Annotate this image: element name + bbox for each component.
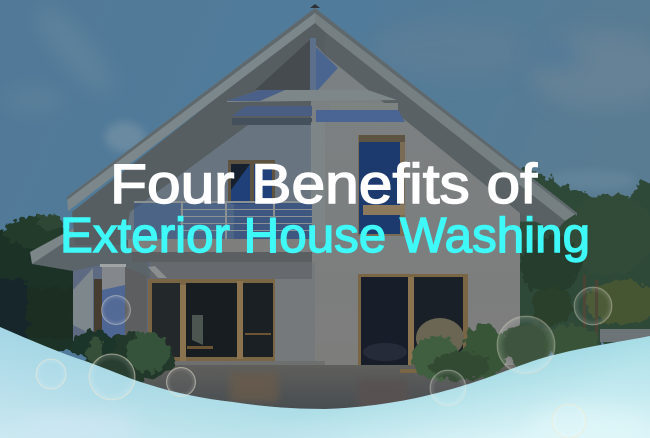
upper left door window: [228, 160, 275, 204]
lower right sliding window: [358, 274, 468, 369]
king post: [310, 38, 316, 98]
title line 2: Exterior House Washing: [60, 209, 590, 263]
terrace floor with reflections: [100, 365, 560, 415]
upper right window: [358, 135, 405, 236]
lower left sliding window: [148, 279, 275, 361]
trees right: [510, 168, 650, 345]
wing wall: [73, 262, 150, 345]
roof fascia: [67, 4, 577, 232]
bush left: [73, 331, 175, 382]
dark wooden door strip: [94, 279, 102, 334]
upper left wall: [125, 125, 312, 240]
brick pillar: [100, 264, 147, 345]
slanted beam: [148, 266, 167, 278]
balcony slab: [128, 239, 312, 262]
soap bubbles: [36, 287, 612, 438]
bush right: [412, 323, 596, 380]
blue gable panel: [316, 47, 338, 92]
title: [60, 152, 590, 263]
trees left: [0, 214, 90, 352]
soffit gable: [72, 20, 565, 245]
upper soffit shadow: [255, 38, 312, 90]
paving: [150, 361, 325, 371]
bushes: [73, 323, 596, 382]
balcony railing: [134, 201, 312, 239]
beam and slats: [227, 90, 405, 242]
wing light patch: [73, 268, 93, 335]
water wave: [0, 327, 650, 438]
title line 1: Four Benefits of: [110, 152, 537, 215]
lower wall: [150, 262, 315, 370]
house: [30, 4, 577, 372]
right wall: [311, 40, 520, 372]
garden wall and trunk: [583, 275, 650, 342]
wing roof: [30, 221, 168, 279]
